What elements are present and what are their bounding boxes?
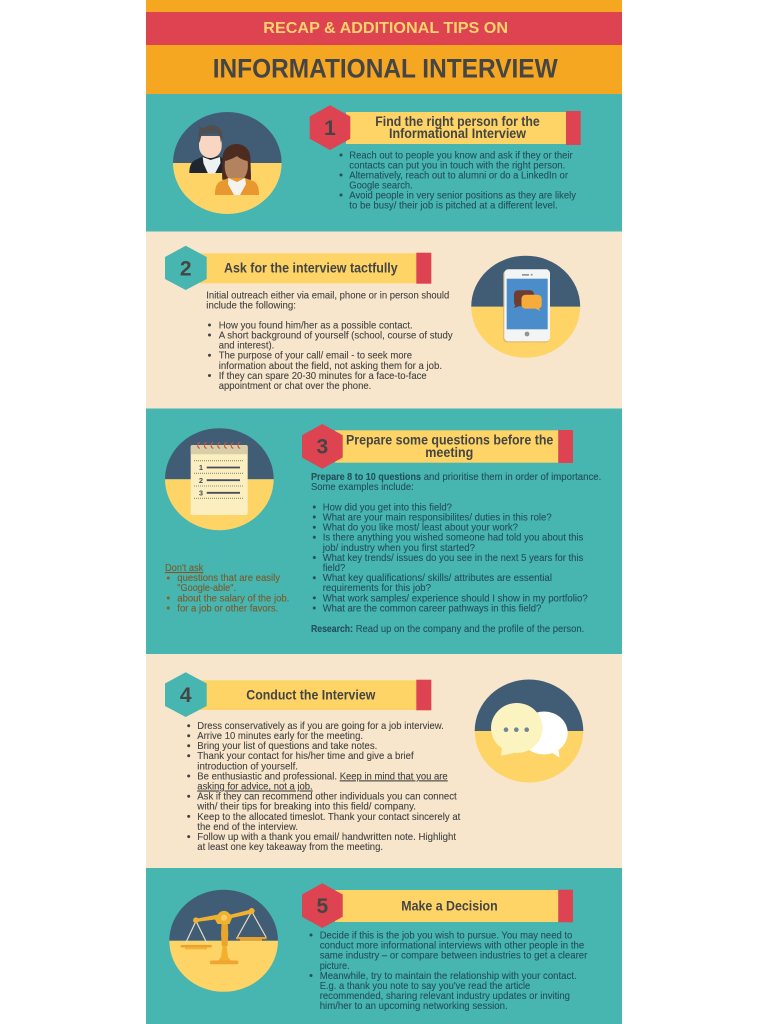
step 5 bullet list: picture. xyxy=(320,961,350,972)
step 4 bullet list xyxy=(187,721,460,853)
step 1 ribbon: Informational Interview xyxy=(389,126,526,141)
step 5 ribbon: Make a Decision xyxy=(401,898,498,914)
step 1 bullet list: Reach out to people you know and ask if they or their xyxy=(349,150,573,162)
step 2 text xyxy=(206,290,454,392)
step 3 question list xyxy=(311,472,601,635)
panel: step 2 ask tactfully xyxy=(146,232,622,408)
step 5 bullet list xyxy=(310,930,588,1012)
step 3 question list: What are your main responsibilites/ duties in this role? xyxy=(323,512,552,524)
step 5 bullet list: recommended, sharing relevant industry updates or inviting xyxy=(320,991,570,1002)
header banner xyxy=(146,0,622,94)
step 3 question list: job/ industry when you first started? xyxy=(322,543,475,554)
panel: step 1 find the right person xyxy=(146,94,622,232)
step 2 text: include the following: xyxy=(206,300,296,312)
don't ask callout: about the salary of the job. xyxy=(177,593,289,604)
step 3 question list: How did you get into this field? xyxy=(323,502,452,514)
step 3 ribbon: 3 xyxy=(316,436,328,459)
step 2 text: A short background of yourself (school, course of study xyxy=(219,330,454,342)
icon: numbered notepad: 1 xyxy=(199,463,203,472)
step 5 bullet list: same industry – or compare between industries to get a clearer xyxy=(320,951,588,962)
step 4 bullet list: Follow up with a thank you email/ handwritten note. Highlight xyxy=(197,832,456,843)
don't ask callout: for a job or other favors. xyxy=(177,603,278,614)
step 4 bullet list: asking for advice, not a job. xyxy=(197,782,313,792)
panel: step 5 make a decision xyxy=(146,868,622,1024)
icon: speech bubbles xyxy=(475,680,583,782)
step 4 bullet list: introduction of yourself. xyxy=(197,761,298,772)
step 4 ribbon xyxy=(165,672,431,717)
step 3 question list: Research: xyxy=(311,624,353,635)
step 3 question list: Prepare 8 to 10 questions xyxy=(311,472,421,483)
step 4 bullet list: Arrive 10 minutes early for the meeting. xyxy=(197,731,363,742)
icon: two people in a circle xyxy=(173,112,282,214)
step 3 question list: field? xyxy=(323,563,346,574)
step 3 question list: and prioritise them in order of importance. xyxy=(424,472,601,483)
step 3 ribbon xyxy=(302,424,573,469)
step 2 text: appointment or chat over the phone. xyxy=(219,381,371,392)
step 3 question list: What key trends/ issues do you see in the next 5 years for this xyxy=(323,553,583,564)
step 5 bullet list: Decide if this is the job you wish to pursue. You may need to xyxy=(320,930,573,942)
step 1 ribbon xyxy=(310,105,581,150)
panel: step 4 conduct the interview xyxy=(146,654,622,868)
step 5 bullet list: Meanwhile, try to maintain the relationship with your contact. xyxy=(320,971,577,982)
step 3 question list: Some examples include: xyxy=(311,482,414,493)
panel: step 3 prepare questions xyxy=(146,408,622,654)
icon: numbered notepad: 2 xyxy=(199,476,203,485)
subtitle: RECAP & ADDITIONAL TIPS ON xyxy=(263,20,508,37)
step 3 ribbon: meeting xyxy=(425,445,473,460)
don't ask callout xyxy=(165,563,289,614)
step 5 bullet list: E.g. a thank you note to say you've read the article xyxy=(320,981,531,992)
don't ask callout: questions that are easily xyxy=(177,573,281,584)
step 2 text: and interest). xyxy=(219,341,274,352)
step 1 bullet list: to be busy/ their job is pitched at a different level. xyxy=(349,200,558,212)
step 2 text: information about the field, not asking them for a job. xyxy=(219,361,442,372)
step 4 ribbon: Conduct the Interview xyxy=(246,688,376,703)
step 4 bullet list: at least one key takeaway from the meeting. xyxy=(197,842,383,853)
don't ask callout: "Google-able". xyxy=(177,583,236,594)
step 4 bullet list: Dress conservatively as if you are going for a job interview. xyxy=(197,721,444,732)
step 4 bullet list: Ask if they can recommend other individuals you can connect xyxy=(197,792,457,803)
step 1 bullet list: Avoid people in very senior positions as they are likely xyxy=(349,190,577,202)
step 2 ribbon: 2 xyxy=(180,257,192,280)
step 3 question list: requirements for this job? xyxy=(323,583,431,594)
step 1 bullet list: Google search. xyxy=(349,180,413,192)
step 4 bullet list: Bring your list of questions and take notes. xyxy=(197,741,377,752)
step 1 ribbon: 1 xyxy=(324,117,336,140)
don't ask callout: Don't ask xyxy=(165,563,204,574)
step 5 ribbon xyxy=(302,883,573,928)
step 3 question list: What are the common career pathways in this field? xyxy=(323,603,542,614)
step 4 bullet list: Be enthusiastic and professional. xyxy=(197,771,337,782)
step 2 ribbon: Ask for the interview tactfully xyxy=(224,260,398,276)
step 2 ribbon xyxy=(165,246,431,290)
step 3 question list: Read up on the company and the profile of the person. xyxy=(356,624,584,635)
step 5 bullet list: conduct more informational interviews with other people in the xyxy=(320,941,585,952)
step 1 ribbon: Find the right person for the xyxy=(375,114,540,129)
step 4 ribbon: 4 xyxy=(180,684,192,707)
step 1 bullet list xyxy=(340,150,577,212)
step 3 ribbon: Prepare some questions before the xyxy=(346,432,554,448)
step 4 bullet list: Keep in mind that you are xyxy=(340,771,448,782)
step 5 bullet list: him/her to an upcoming networking session. xyxy=(320,1001,508,1012)
icon: balance scale xyxy=(169,890,278,992)
step 3 question list: What key qualifications/ skills/ attributes are essential xyxy=(323,573,552,584)
step 3 question list: Is there anything you wished someone had told you about this xyxy=(323,533,583,544)
step 3 question list: What do you like most/ least about your work? xyxy=(323,523,518,534)
step 2 text: If they can spare 20-30 minutes for a face-to-face xyxy=(219,371,427,382)
step 3 question list: What work samples/ experience should I show in my portfolio? xyxy=(323,593,588,604)
step 4 bullet list: Thank your contact for his/her time and give a brief xyxy=(197,751,414,762)
step 2 text: The purpose of your call/ email - to seek more xyxy=(219,351,412,362)
step 1 bullet list: Alternatively, reach out to alumni or do a LinkedIn or xyxy=(349,170,569,182)
step 1 bullet list: contacts can put you in touch with the right person. xyxy=(349,160,565,172)
icon: smartphone with chat bubbles xyxy=(471,256,580,358)
step 4 bullet list: with/ their tips for breaking into this field/ company. xyxy=(196,802,416,813)
icon: numbered notepad xyxy=(165,428,274,530)
step 4 bullet list: Keep to the allocated timeslot. Thank your contact sincerely at xyxy=(197,812,460,823)
step 5 ribbon: 5 xyxy=(316,895,328,918)
icon: numbered notepad: 3 xyxy=(199,488,203,498)
title: INFORMATIONAL INTERVIEW xyxy=(213,54,558,84)
step 4 bullet list: the end of the interview. xyxy=(197,822,298,833)
step 2 text: How you found him/her as a possible contact. xyxy=(219,320,413,332)
step 2 text: Initial outreach either via email, phone or in person should xyxy=(206,290,449,302)
